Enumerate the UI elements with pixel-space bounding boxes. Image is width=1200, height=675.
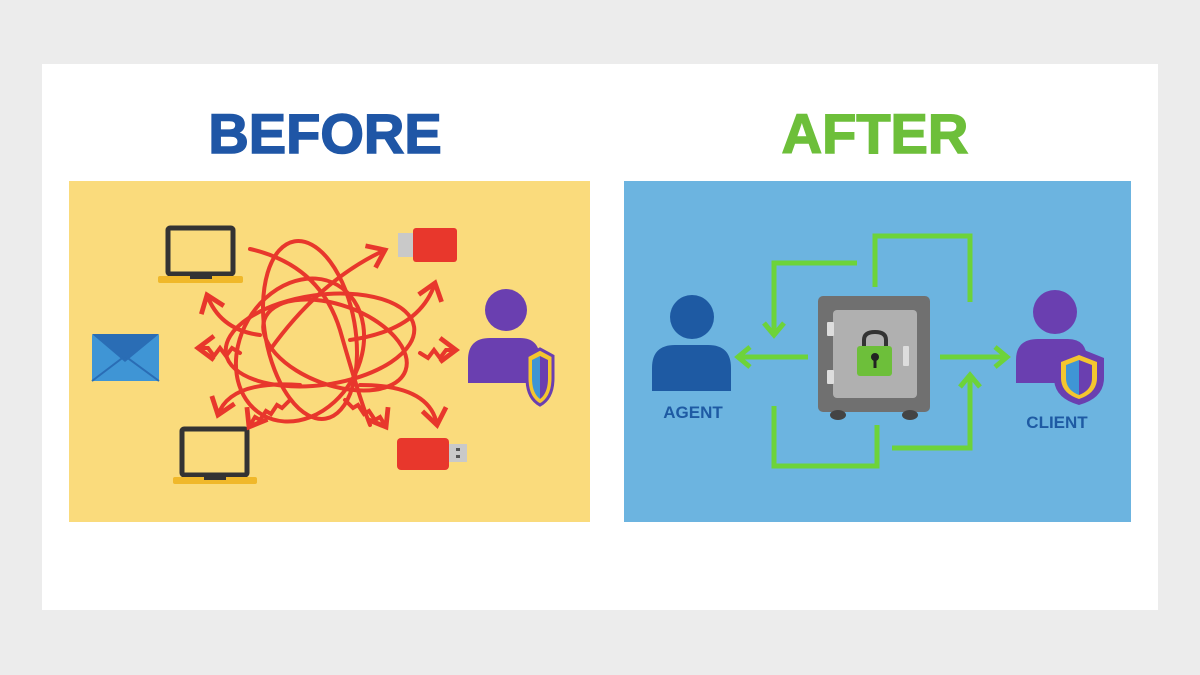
icon: laptop top [158,228,243,283]
icon: laptop bottom [173,429,257,484]
label: AGENT: AGENT [663,403,723,422]
title: BEFORE: BEFORE [208,102,442,165]
panel: after [624,181,1131,522]
icon: envelope [92,334,159,381]
icon: agent [652,295,731,391]
tangled red arrows [198,234,456,445]
panel: before [69,181,590,522]
icon: client with shield [1016,290,1104,405]
title: AFTER: AFTER [782,102,968,165]
icon: safe [818,296,930,420]
white card [42,64,1158,610]
icon: usb top [398,228,457,262]
green arrows [738,236,1007,466]
icon: usb bottom [397,438,467,470]
icon: person with shield [468,289,553,405]
label: CLIENT: CLIENT [1026,413,1088,432]
